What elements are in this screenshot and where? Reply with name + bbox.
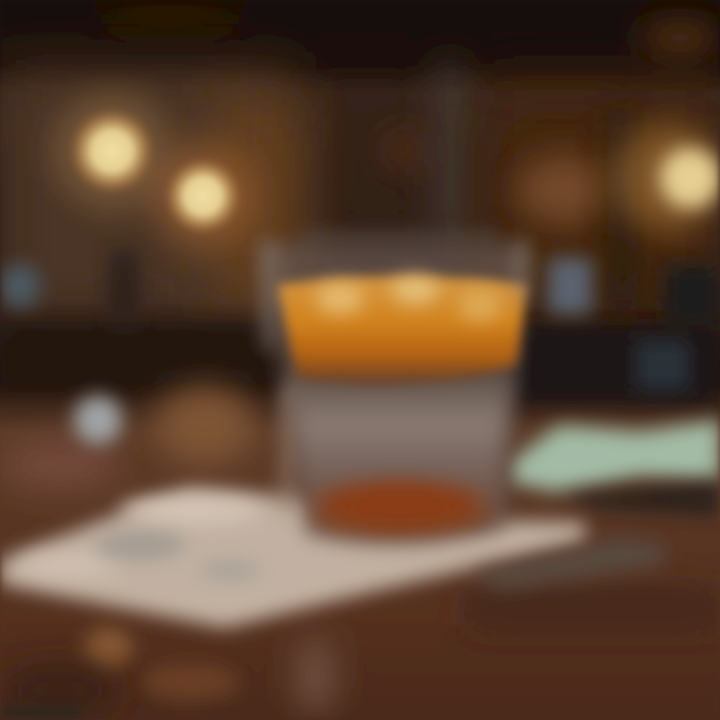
glass body [262, 245, 528, 546]
white napkin [0, 488, 665, 628]
lower liquid [290, 375, 510, 536]
ice cubes [316, 277, 502, 321]
ceiling lights [54, 93, 720, 248]
glass rim highlights [262, 232, 528, 515]
background furniture band [0, 250, 720, 403]
straw [432, 60, 468, 240]
table top [0, 385, 720, 720]
green napkin [510, 420, 720, 516]
amber bottom layer [322, 481, 478, 529]
orange drink with ice [277, 276, 526, 386]
drink glass [262, 232, 528, 546]
